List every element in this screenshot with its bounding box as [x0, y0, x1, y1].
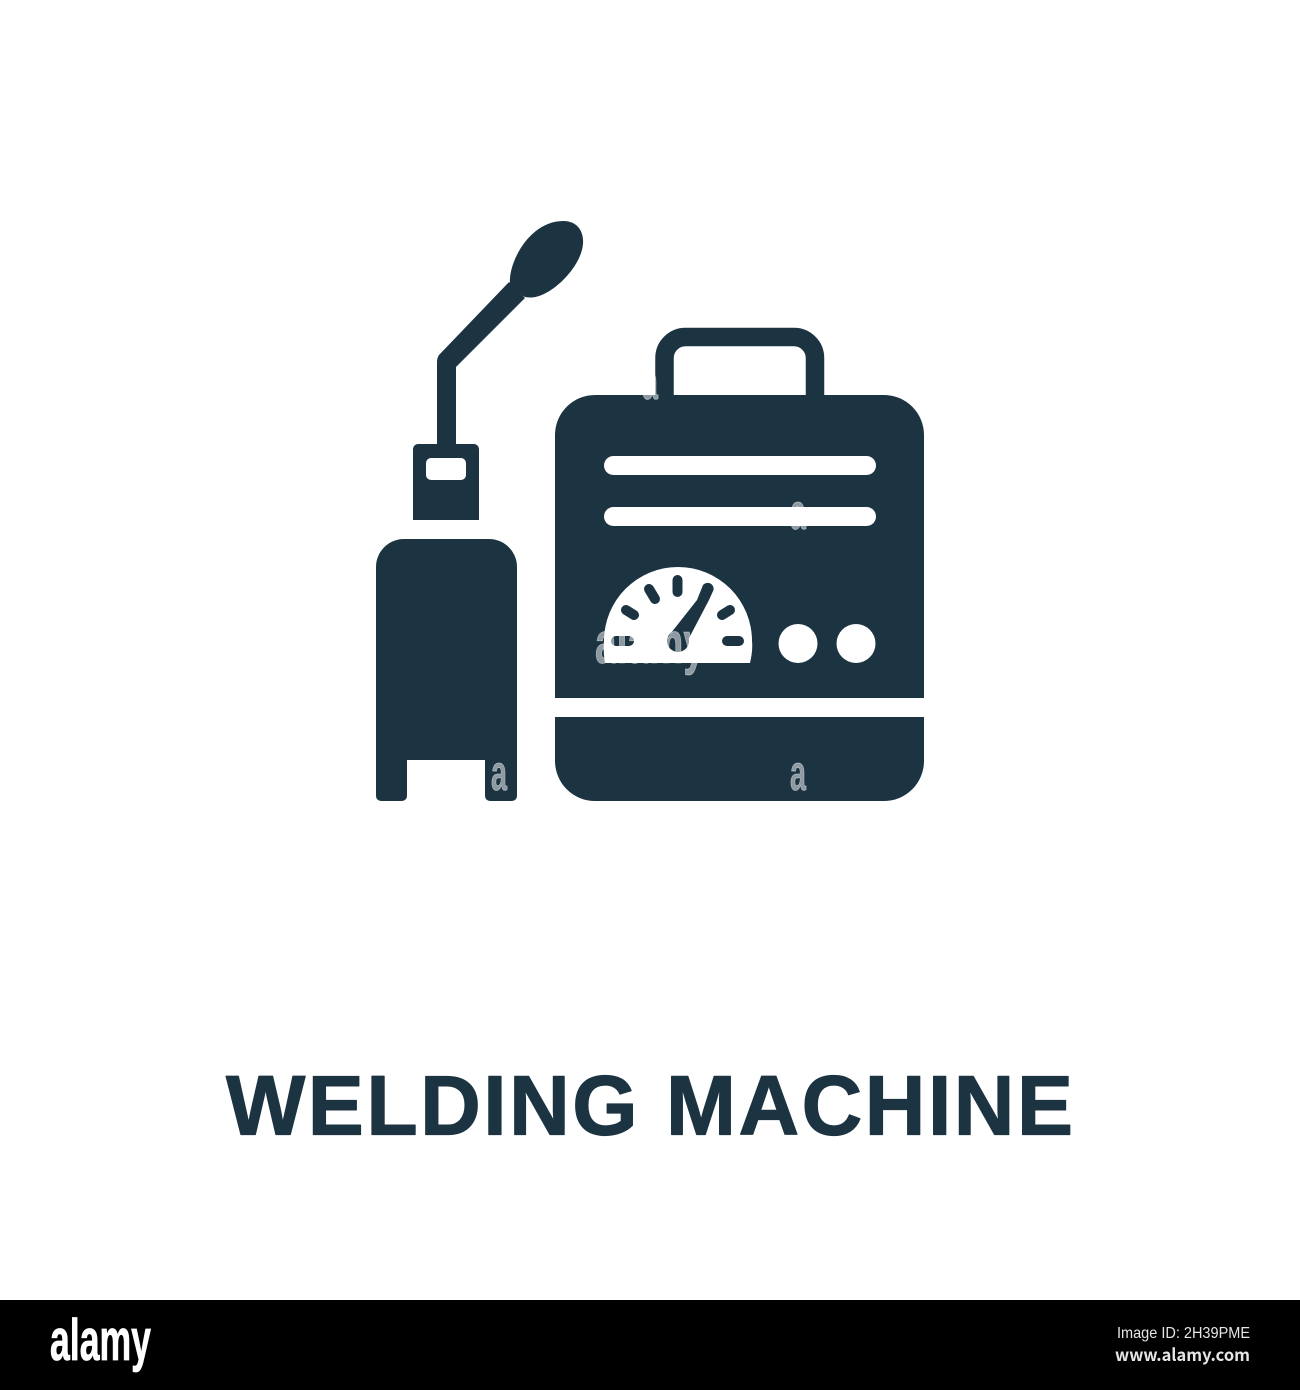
icon: welding torch and gas cylinder [376, 221, 583, 801]
website: www.alamy.com [1115, 1341, 1250, 1366]
gauge needle [667, 583, 714, 652]
machine base [555, 717, 924, 801]
watermark traces: a [790, 484, 807, 540]
panel lines [604, 456, 876, 526]
title: WELDING MACHINE [226, 1058, 1073, 1152]
torch connector [413, 444, 479, 520]
machine handle [664, 337, 815, 400]
gauge ticks [616, 580, 739, 641]
watermark traces: a [790, 745, 807, 801]
watermark traces [491, 354, 807, 801]
torch neck [437, 282, 525, 450]
alamy logo: alamy [50, 1308, 151, 1373]
control knobs [778, 624, 876, 663]
machine body [555, 395, 924, 698]
watermark traces: a [491, 745, 508, 801]
watermark traces: a [642, 354, 659, 410]
icon: welding machine [491, 337, 924, 801]
footer bar [0, 1300, 1300, 1390]
gas cylinder [376, 539, 517, 801]
torch head [510, 221, 583, 298]
gauge dial [604, 567, 752, 663]
image id: Image ID: 2H39PME [1117, 1325, 1250, 1342]
watermark traces: alamy [595, 611, 705, 676]
